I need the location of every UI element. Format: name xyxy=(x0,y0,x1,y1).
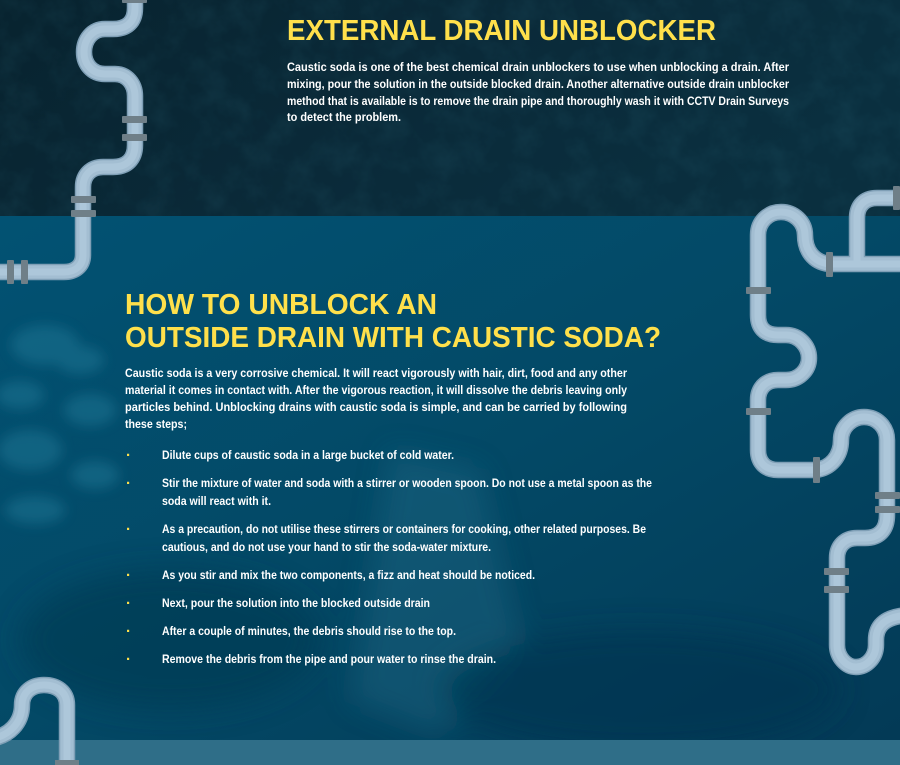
step 4: As you stir and mix the two components, a fizz and heat should be noticed. xyxy=(162,570,535,582)
step 7 xyxy=(126,651,496,668)
step 6: · xyxy=(126,623,131,640)
step 7: Remove the debris from the pipe and pour water to rinse the drain. xyxy=(162,654,496,666)
panel: top section background xyxy=(0,0,900,216)
step 2 xyxy=(126,475,652,508)
step 5 xyxy=(126,595,430,612)
text block: caustic soda intro paragraph: these steps; xyxy=(125,419,187,431)
step 5: Next, pour the solution into the blocked outside drain xyxy=(162,598,430,610)
step 3 xyxy=(126,521,646,554)
heading: how to unblock an outside drain xyxy=(125,289,661,354)
panel: bottom band xyxy=(0,740,900,765)
step 4: · xyxy=(126,567,131,584)
text block: external drain paragraph: Caustic soda is one of the best chemical drain unblockers to use when unblocking a drain. After xyxy=(287,62,789,74)
step 3: cautious, and do not use your hand to stir the soda-water mixture. xyxy=(162,542,491,554)
text block: caustic soda intro paragraph: particles behind. Unblocking drains with caustic soda is simple, and can be carried by following xyxy=(125,402,627,414)
step 6 xyxy=(126,623,456,640)
list: steps xyxy=(126,447,652,668)
heading: external drain unblocker: EXTERNAL DRAIN UNBLOCKER xyxy=(287,15,716,47)
text block: caustic soda intro paragraph: material it comes in contact with. After the vigorous reaction, it will dissolve the debris leaving only xyxy=(125,385,628,397)
pipe: right long run xyxy=(746,212,900,667)
step 3: · xyxy=(126,521,131,538)
text block: caustic soda intro paragraph: Caustic soda is a very corrosive chemical. It will react vigorously with hair, dirt, food and any other xyxy=(125,368,627,380)
text block: caustic soda intro paragraph xyxy=(125,368,628,431)
step 1 xyxy=(126,447,454,464)
pipe: bottom left xyxy=(0,685,79,765)
step 1: Dilute cups of caustic soda in a large bucket of cold water. xyxy=(162,450,454,462)
text block: external drain paragraph: to detect the problem. xyxy=(287,112,401,124)
pipe: top left xyxy=(0,0,147,284)
pipe: upper right branch xyxy=(830,186,900,264)
step 2: · xyxy=(126,475,131,492)
step 7: · xyxy=(126,651,131,668)
step 4 xyxy=(126,567,535,584)
step 1: · xyxy=(126,447,131,464)
step 2: soda will react with it. xyxy=(162,496,271,508)
step 3: As a precaution, do not utilise these stirrers or containers for cooking, other related purposes. Be xyxy=(162,524,646,536)
text block: external drain paragraph: mixing, pour the solution in the outside blocked drain. Another alternative outside drain unblocker xyxy=(287,79,789,91)
panel: middle section background xyxy=(0,216,900,750)
step 2: Stir the mixture of water and soda with a stirrer or wooden spoon. Do not use a metal spoon as the xyxy=(162,478,652,490)
step 5: · xyxy=(126,595,131,612)
text block: external drain paragraph: method that is available is to remove the drain pipe and thoroughly wash it with CCTV Drain Surveys xyxy=(287,96,789,108)
text block: external drain paragraph xyxy=(287,62,789,124)
step 6: After a couple of minutes, the debris should rise to the top. xyxy=(162,626,456,638)
heading: how to unblock an outside drain: OUTSIDE DRAIN WITH CAUSTIC SODA? xyxy=(125,322,661,354)
heading: how to unblock an outside drain: HOW TO UNBLOCK AN xyxy=(125,289,437,321)
